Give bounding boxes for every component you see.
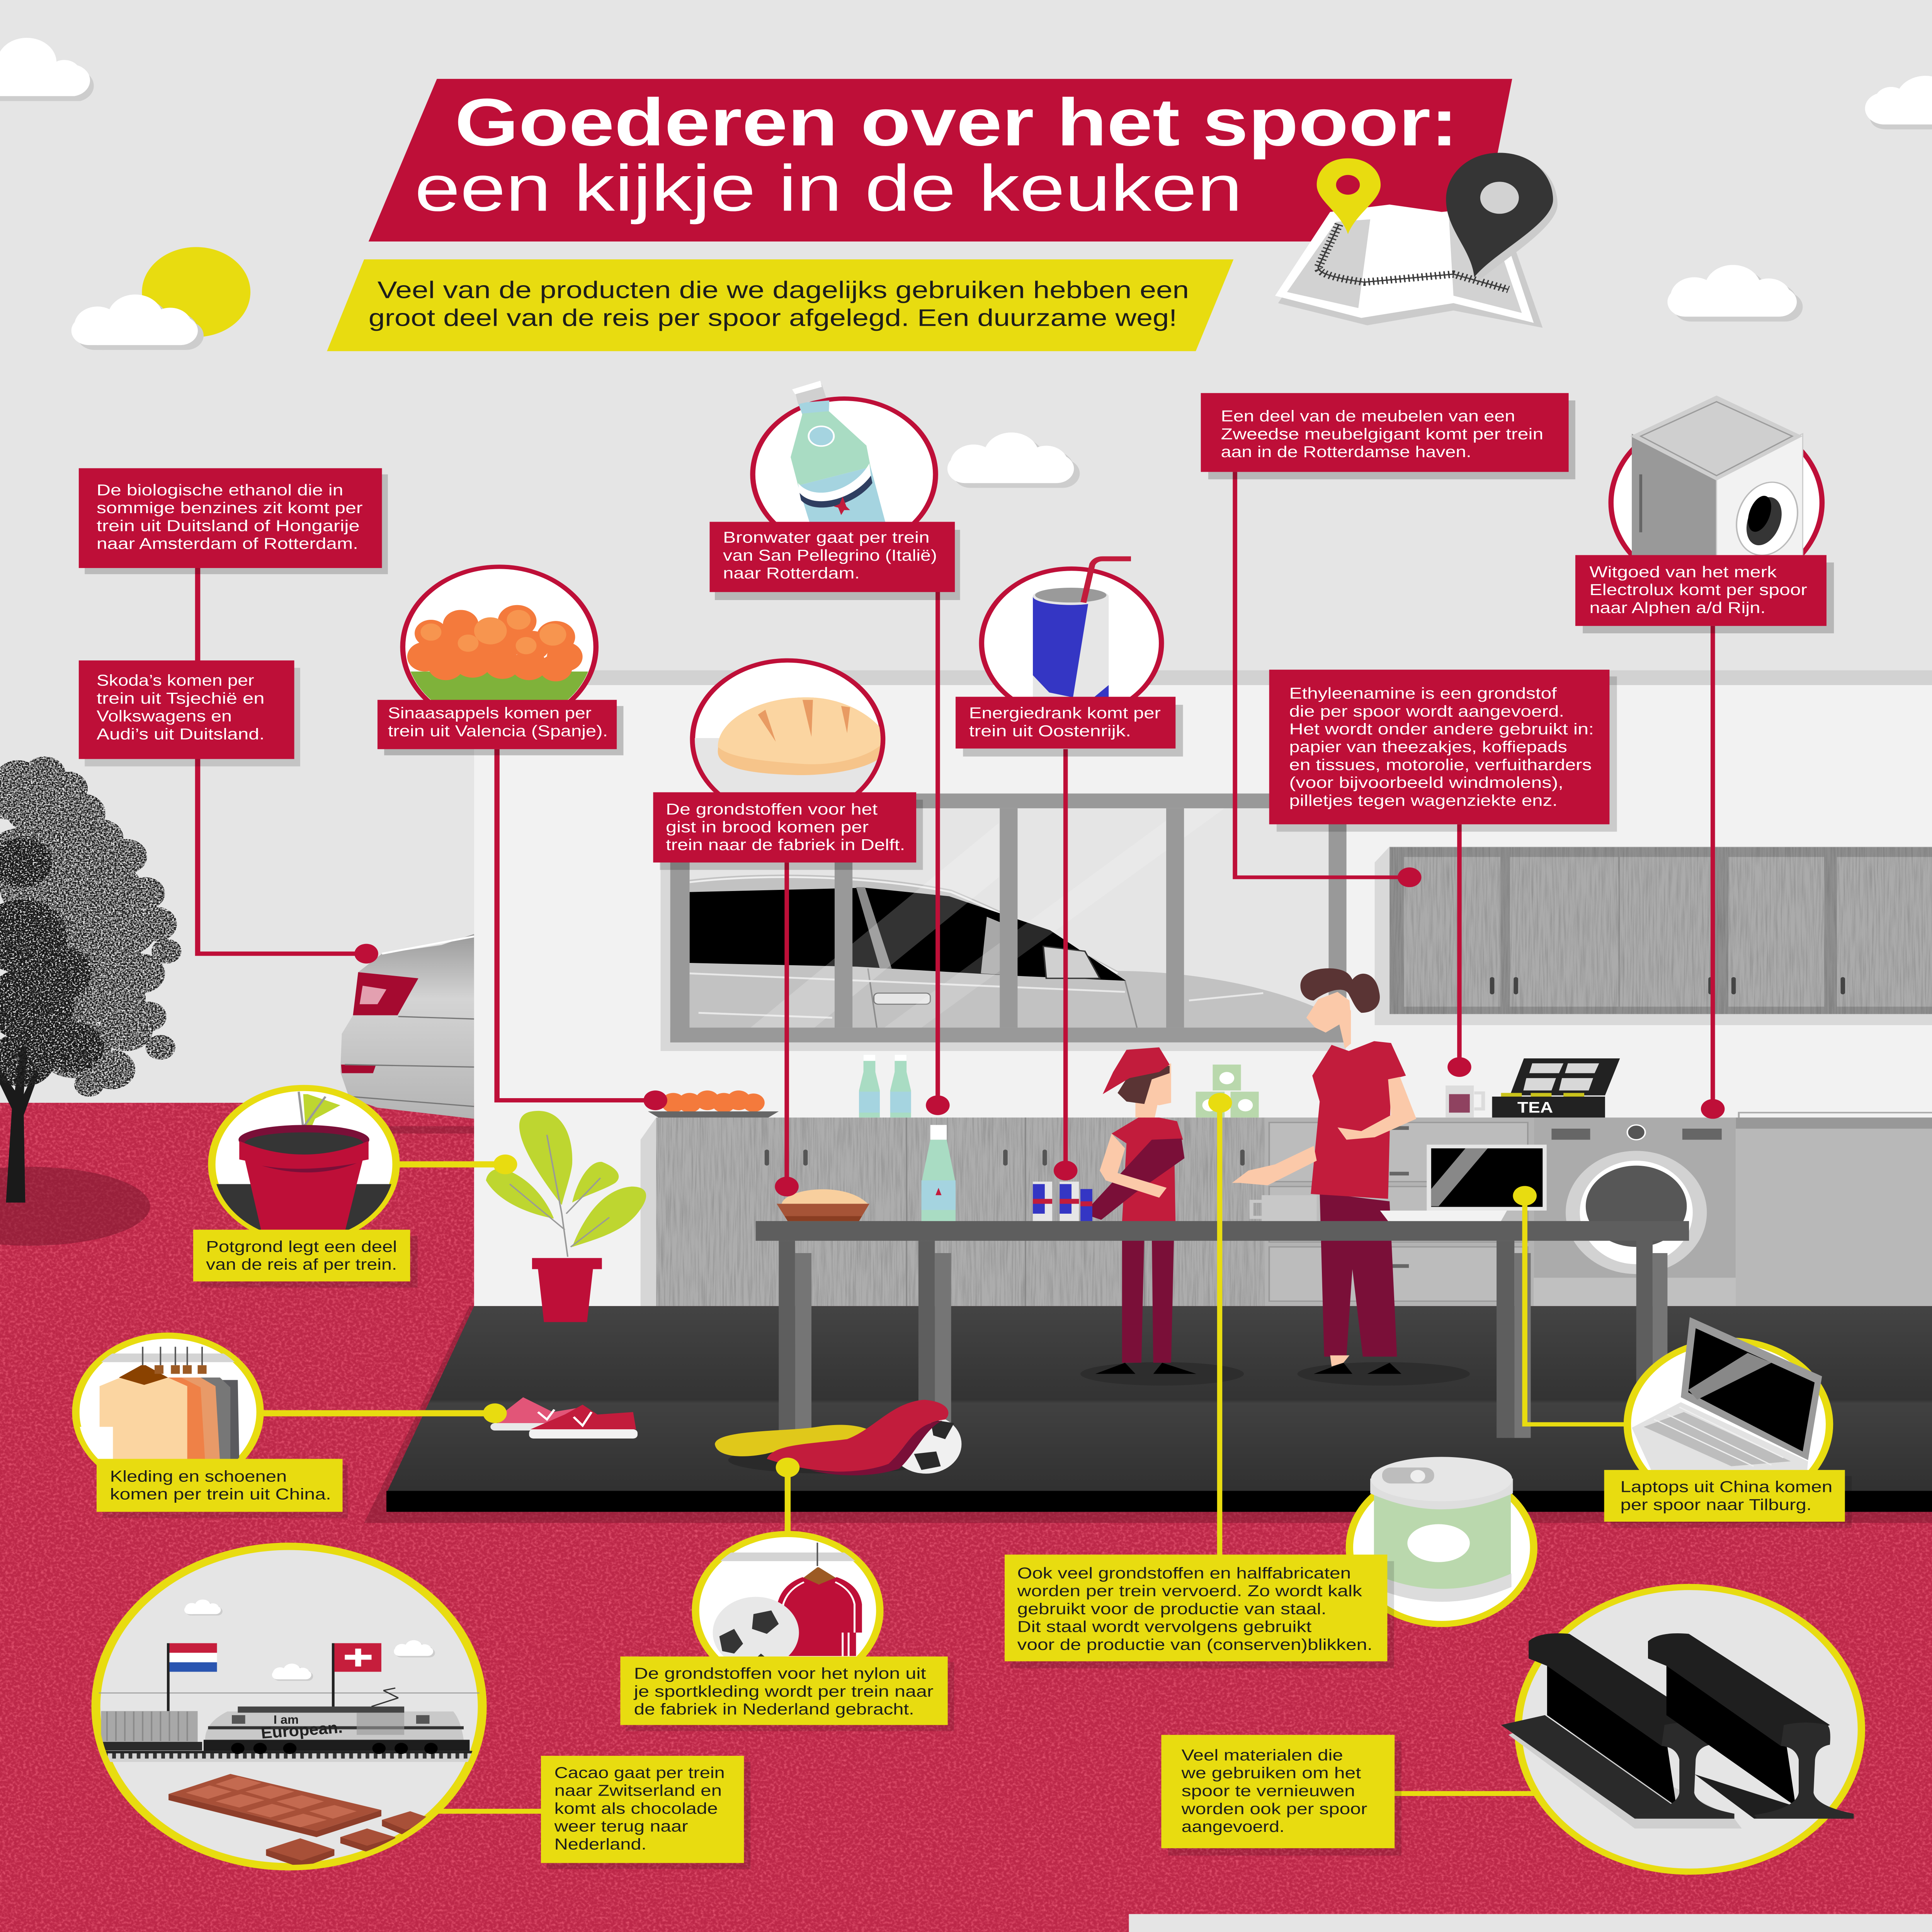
callout: ethanol: trein uit Duitsland of Hongarije: [97, 517, 360, 534]
tea box: [1492, 1058, 1620, 1117]
connector: oranges: [497, 749, 655, 1100]
dot: laptop: [1513, 1186, 1537, 1206]
callout: nylon: De grondstoffen voor het nylon uit: [634, 1665, 926, 1682]
heading: main title: Goederen over het spoor:: [455, 85, 1458, 160]
dot: tea: [1447, 1057, 1471, 1077]
icon: map with pins and track: [1275, 153, 1558, 328]
callout: cacao: Nederland.: [554, 1835, 646, 1853]
cloud top right: [1865, 76, 1932, 129]
car rear: [340, 934, 474, 1134]
connector: energy drink: [1065, 749, 1066, 1170]
stacked cans: [1196, 1065, 1259, 1117]
tea mug: [1446, 1085, 1483, 1117]
callout: ethyleneamine: en tissues, motorolie, verfuitharders: [1289, 756, 1592, 774]
callout: furniture: Zweedse meubelgigant komt per trein: [1221, 425, 1543, 443]
tea box: TEA: [1517, 1099, 1553, 1116]
callout: ethanol: naar Amsterdam of Rotterdam.: [97, 535, 358, 553]
red ground: [0, 1103, 1932, 1932]
locomotive: I am: [274, 1713, 299, 1726]
callout: water: naar Rotterdam.: [723, 564, 860, 582]
dot: furniture: [1398, 867, 1421, 887]
callout: cars: trein uit Tsjechië en: [97, 689, 265, 707]
callout: nylon: de fabriek in Nederland gebracht.: [634, 1700, 914, 1718]
panel: washing machine: [1611, 396, 1822, 590]
locomotive: European.: [260, 1718, 344, 1742]
sports gear on floor: [715, 1400, 961, 1475]
callout: ethyleneamine: die per spoor wordt aangevoerd.: [1289, 702, 1564, 720]
heading: subtitle: een kijkje in de keuken: [415, 152, 1242, 224]
callout: furniture: Een deel van de meubelen van een: [1221, 407, 1515, 425]
panel: energy drink: [981, 559, 1162, 718]
horizon line: [89, 1692, 490, 1693]
lower cabinets and counter: [641, 1112, 1932, 1306]
callout: water: van San Pellegrino (Italië): [723, 546, 937, 564]
callout: cacao: Cacao gaat per trein: [554, 1764, 725, 1781]
callout: laptops: per spoor naar Tilburg.: [1620, 1496, 1811, 1514]
panel: laptop: [1628, 1317, 1830, 1508]
callout: raw materials: voor de productie van (conserven)blikken.: [1017, 1636, 1372, 1653]
panel: train and chocolate: [89, 1546, 490, 1868]
callout: ethanol: sommige benzines zit komt per: [97, 499, 363, 517]
callout: bread: De grondstoffen voor het: [666, 800, 878, 818]
mug on table: [1251, 1195, 1317, 1221]
table: [756, 1221, 1689, 1438]
chocolate pieces: [266, 1811, 435, 1868]
kitchen wall: [474, 670, 1932, 1306]
washing machine: [1534, 1117, 1736, 1306]
callout: ethyleneamine: (voor bijvoorbeeld windmolens),: [1289, 774, 1563, 791]
track bed: [89, 1751, 490, 1762]
callout: cars: Audi’s uit Duitsland.: [97, 725, 265, 743]
panel: clothing: [74, 1336, 262, 1488]
callout: ethanol: [79, 468, 388, 574]
callout: cars: Volkswagens en: [97, 707, 232, 725]
callout: energy drink: Energiedrank komt per: [969, 704, 1161, 722]
energy drink cans on table: [1033, 1182, 1092, 1221]
shoes: [490, 1397, 638, 1439]
callout: rail materials: worden ook per spoor: [1181, 1800, 1367, 1818]
callout: bread: trein naar de fabriek in Delft.: [666, 836, 905, 854]
dot: cans: [1208, 1093, 1232, 1112]
dot: shoes: [483, 1403, 507, 1423]
tree: [0, 757, 181, 1246]
locomotive: [204, 1688, 469, 1754]
connector: clothing: [262, 1412, 495, 1414]
callout: rail materials: [1161, 1735, 1401, 1855]
title banner: [369, 79, 1512, 242]
callout: furniture: [1201, 393, 1575, 479]
callout: laptops: [1604, 1470, 1852, 1528]
flag: Netherlands: [167, 1643, 217, 1712]
callout: cars: [79, 660, 300, 766]
connector: furniture: [1235, 472, 1409, 877]
items on counter: water bottles: [859, 1055, 911, 1117]
flag: Switzerland: [332, 1643, 381, 1712]
dot: plant: [493, 1155, 517, 1174]
callout: clothing: komen per trein uit China.: [110, 1485, 331, 1503]
connector: water: [937, 592, 938, 1105]
child figure: [1083, 1047, 1196, 1374]
icon: sun: [142, 247, 250, 337]
drawers: [1265, 1117, 1534, 1306]
callout: potting soil: [193, 1230, 418, 1287]
woman figure: [1232, 968, 1416, 1374]
intro panel: [327, 259, 1233, 351]
window with car: [661, 794, 1347, 1051]
plant: [486, 1111, 646, 1322]
callout: potting soil: van de reis af per trein.: [206, 1255, 397, 1273]
dot: car: [354, 944, 378, 964]
upper cabinets: [1375, 847, 1932, 1025]
callout: nylon: [620, 1656, 954, 1731]
cloud top left: [0, 38, 94, 101]
callout: ethyleneamine: papier van theezakjes, koffiepads: [1289, 738, 1567, 756]
callout: water: [710, 522, 960, 600]
connector: bread: [786, 862, 787, 1187]
callout: ethyleneamine: Het wordt onder andere gebruikt in:: [1289, 720, 1594, 738]
connector: ethanol: [198, 568, 366, 954]
dot: oranges: [643, 1090, 667, 1110]
callout: raw materials: Ook veel grondstoffen en halffabricaten: [1017, 1564, 1351, 1582]
panel: sportswear: [696, 1534, 881, 1687]
callout: cacao: [541, 1756, 750, 1869]
callout: rail materials: Veel materialen die: [1182, 1746, 1343, 1764]
rail right: [1648, 1633, 1854, 1819]
floor: [364, 1306, 1932, 1523]
chocolate bar: [168, 1774, 381, 1837]
callout: nylon: je sportkleding wordt per trein naar: [633, 1682, 934, 1700]
callout: oranges: [378, 700, 623, 755]
callout: oranges: Sinaasappels komen per: [388, 704, 592, 722]
callout: raw materials: [1005, 1554, 1394, 1668]
panel: oranges: [400, 565, 599, 700]
callout: white goods: Electrolux komt per spoor: [1589, 581, 1807, 599]
rail track: [89, 1751, 490, 1756]
callout: white goods: [1575, 555, 1834, 633]
panel: potting soil: [208, 1088, 401, 1246]
callout: oranges: trein uit Valencia (Spanje).: [388, 722, 608, 740]
callout: ethanol: De biologische ethanol die in: [97, 481, 343, 499]
callout: furniture: aan in de Rotterdamse haven.: [1221, 443, 1471, 461]
dot: energy drink: [1054, 1161, 1077, 1180]
connector: cacao: [431, 1811, 541, 1812]
callout: bread: [653, 792, 923, 870]
callout: cacao: weer terug naar: [554, 1817, 688, 1835]
connector: rails: [1394, 1793, 1534, 1794]
connector: white goods: [1712, 626, 1713, 1109]
callout: white goods: Witgoed van het merk: [1589, 563, 1777, 581]
panel: rails: [1501, 1587, 1861, 1872]
callout: energy drink: [956, 697, 1183, 757]
connector: raw materials: [1219, 1103, 1220, 1555]
callout: raw materials: Dit staal wordt vervolgens gebruikt: [1017, 1618, 1312, 1636]
intro panel: Veel van de producten die we dagelijks gebruiken hebben een: [378, 277, 1189, 303]
connector: ethyleneamine: [1459, 824, 1460, 1067]
callout: raw materials: gebruikt voor de productie van staal.: [1017, 1600, 1327, 1617]
cloud centre: [947, 432, 1080, 488]
callout: rail materials: spoor te vernieuwen: [1182, 1782, 1355, 1800]
side unit: [1736, 1112, 1932, 1306]
callout: potting soil: Potgrond legt een deel: [206, 1238, 397, 1255]
callout: energy drink: trein uit Oostenrijk.: [969, 722, 1131, 740]
water bottle on table: [922, 1125, 956, 1221]
dot: bread: [775, 1177, 799, 1196]
callout: ethyleneamine: [1269, 670, 1617, 832]
callout: rail materials: aangevoerd.: [1182, 1818, 1284, 1835]
callout: rail materials: we gebruiken om het: [1181, 1764, 1361, 1782]
callout: raw materials: worden per trein vervoerd. Zo wordt kalk: [1017, 1582, 1362, 1600]
callout: laptops: Laptops uit China komen: [1620, 1478, 1832, 1496]
callout: bread: gist in brood komen per: [666, 818, 869, 836]
dot: sports gear: [776, 1458, 799, 1477]
connector: laptop: [1525, 1196, 1626, 1424]
callout: clothing: [97, 1459, 348, 1518]
cloud right of intro: [1667, 265, 1803, 321]
callout: cars: Skoda’s komen per: [97, 672, 254, 689]
laptop on table: [1380, 1145, 1547, 1221]
container wagon: [101, 1711, 202, 1750]
intro panel: groot deel van de reis per spoor afgelegd. Een duurzame weg!: [369, 304, 1177, 331]
callout: white goods: naar Alphen a/d Rijn.: [1589, 599, 1765, 616]
connector: nylon: [787, 1468, 788, 1534]
callout: clothing: Kleding en schoenen: [110, 1467, 287, 1485]
connector: potting soil: [397, 1163, 505, 1165]
dot: water: [926, 1095, 950, 1115]
callout: ethyleneamine: pilletjes tegen wagenziekte enz.: [1289, 791, 1558, 809]
callout: ethyleneamine: Ethyleenamine is een grondstof: [1289, 684, 1557, 702]
panel: bread: [690, 658, 886, 792]
cloud by the sun: [71, 294, 204, 350]
panel: water bottle: [753, 381, 935, 550]
callout: water: Bronwater gaat per trein: [723, 529, 930, 546]
dot: washer: [1701, 1099, 1725, 1119]
rail left: [1501, 1633, 1742, 1828]
bread bowl on table: [777, 1189, 869, 1221]
plate with oranges: [648, 1090, 779, 1117]
callout: cacao: naar Zwitserland en: [554, 1782, 722, 1799]
callout: cacao: komt als chocolade: [554, 1799, 718, 1817]
panel: canned food: [1349, 1457, 1534, 1624]
